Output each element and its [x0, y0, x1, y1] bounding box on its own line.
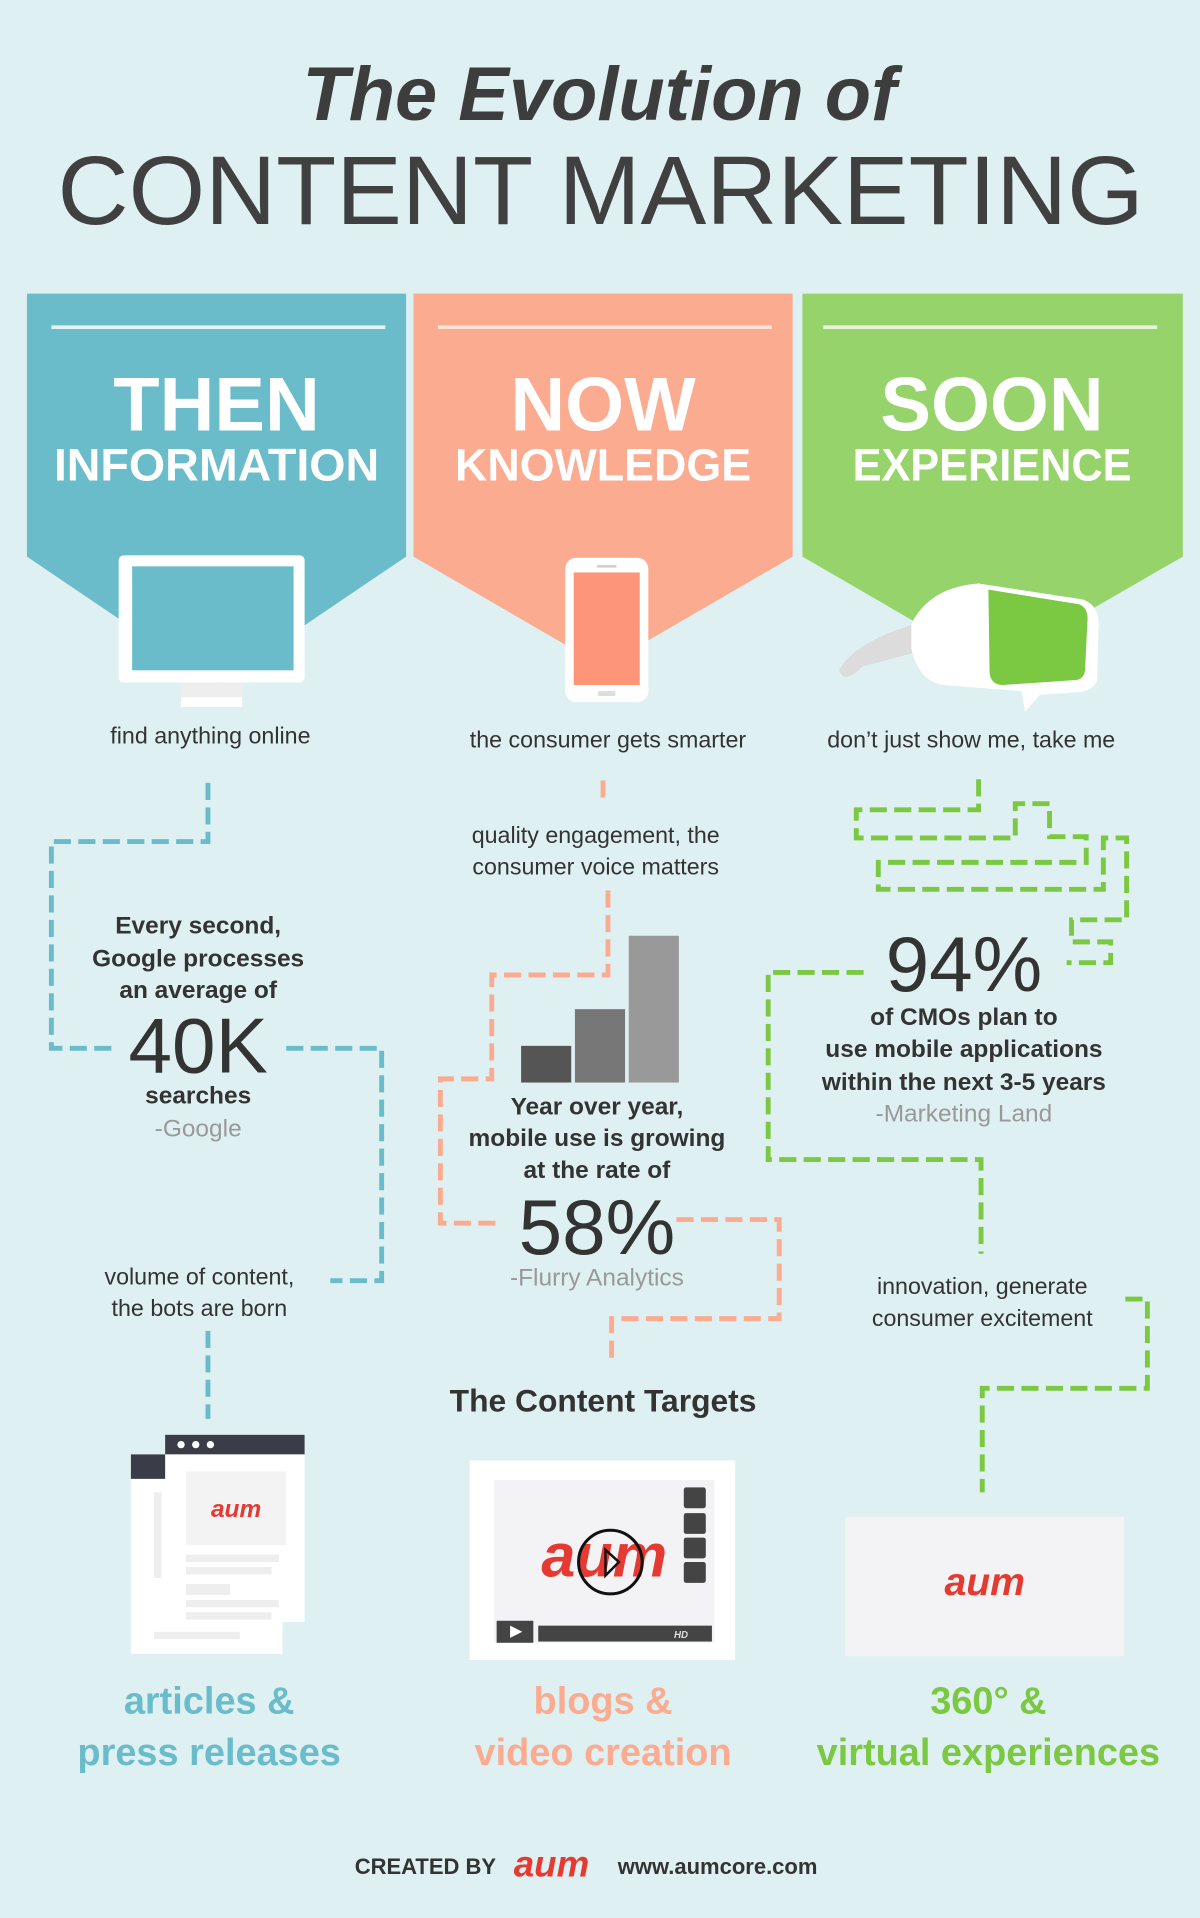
text block: innovation: consumer excitement	[872, 1305, 1093, 1331]
label: 360: 360° &	[930, 1681, 1047, 1723]
text block: 58% stat: at the rate of	[524, 1157, 671, 1184]
label: blogs: video creation	[475, 1732, 732, 1774]
panel: now banner: NOW	[510, 363, 696, 448]
text block: 94% stat: 94%	[886, 920, 1042, 1008]
icon: 360 screen: aum	[944, 1561, 1025, 1604]
text block: volume of content: the bots are born	[112, 1295, 287, 1321]
panel: then banner: THEN	[113, 363, 320, 448]
text block: 40K stat: searches	[145, 1082, 251, 1109]
text block: innovation: innovation, generate	[877, 1273, 1088, 1299]
icon: phone	[565, 558, 648, 702]
text block: column captions: find anything online	[110, 723, 311, 749]
panel: soon banner: EXPERIENCE	[853, 440, 1131, 491]
panel: soon banner: SOON	[880, 363, 1104, 448]
text block: 94% stat: of CMOs plan to	[870, 1004, 1058, 1031]
text block: 94% stat: -Marketing Land	[876, 1101, 1052, 1128]
icon: articles pages	[131, 1435, 305, 1654]
dashed path: blue	[51, 783, 382, 1419]
label: 360	[817, 1681, 1160, 1774]
label: articles	[77, 1681, 341, 1774]
text block: 40K stat: Google processes	[92, 945, 304, 972]
text block: 40K stat: -Google	[155, 1115, 242, 1142]
panel: now banner	[413, 294, 793, 667]
icon: monitor	[119, 555, 305, 707]
label: blogs	[475, 1681, 732, 1774]
text block: quality engagement	[472, 822, 720, 880]
panel: then banner: INFORMATION	[54, 440, 379, 491]
label: articles: articles &	[124, 1681, 295, 1723]
label: articles: press releases	[77, 1732, 341, 1774]
text block: volume of content	[104, 1263, 294, 1321]
title	[58, 52, 1144, 245]
panel: then banner	[27, 294, 406, 685]
title: The Evolution of	[302, 52, 903, 137]
footer credit: aum	[514, 1843, 589, 1884]
title: CONTENT MARKETING	[58, 135, 1144, 245]
icon: articles pages: aum	[211, 1496, 261, 1523]
text block: 94% stat: use mobile applications	[825, 1036, 1103, 1063]
text block: 40K stat: Every second,	[115, 912, 281, 939]
icon: video player	[470, 1461, 735, 1660]
text block: 94% stat	[821, 920, 1106, 1128]
footer credit	[355, 1843, 817, 1884]
text block: 58% stat: 58%	[519, 1183, 675, 1271]
text block: quality engagement: quality engagement, the	[472, 822, 720, 848]
text block: volume of content: volume of content,	[104, 1263, 294, 1289]
label: blogs: blogs &	[534, 1681, 673, 1723]
text block: innovation	[872, 1273, 1093, 1331]
bar chart	[521, 936, 679, 1083]
text block: 58% stat: Year over year,	[511, 1093, 683, 1120]
text block: 94% stat: within the next 3-5 years	[821, 1069, 1106, 1096]
text block: column captions	[110, 723, 1115, 752]
label: 360: virtual experiences	[817, 1732, 1160, 1774]
icon: vr headset	[839, 583, 1099, 712]
icon: video player: HD	[674, 1630, 688, 1641]
text block: column captions: the consumer gets smarter	[470, 726, 746, 752]
text block: 58% stat: mobile use is growing	[469, 1125, 725, 1152]
text block: 58% stat	[469, 1093, 725, 1292]
text block: 58% stat: -Flurry Analytics	[510, 1265, 684, 1292]
text block: column captions: don’t just show me, take me	[827, 726, 1115, 752]
text block: 40K stat: 40K	[129, 1002, 268, 1090]
panel: now banner: KNOWLEDGE	[455, 440, 751, 491]
footer credit: CREATED BY	[355, 1854, 496, 1879]
dashed path: salmon	[440, 780, 779, 1364]
icon: 360 screen	[845, 1517, 1124, 1656]
text block: 40K stat	[92, 912, 304, 1142]
heading: content targets: The Content Targets	[450, 1383, 756, 1419]
footer credit: www.aumcore.com	[617, 1854, 817, 1879]
text block: quality engagement: consumer voice matters	[472, 854, 719, 880]
text block: 40K stat: an average of	[119, 977, 278, 1004]
icon: video player: aum	[541, 1522, 667, 1590]
dashed path: green	[768, 779, 1147, 1492]
panel: soon banner	[802, 294, 1183, 667]
